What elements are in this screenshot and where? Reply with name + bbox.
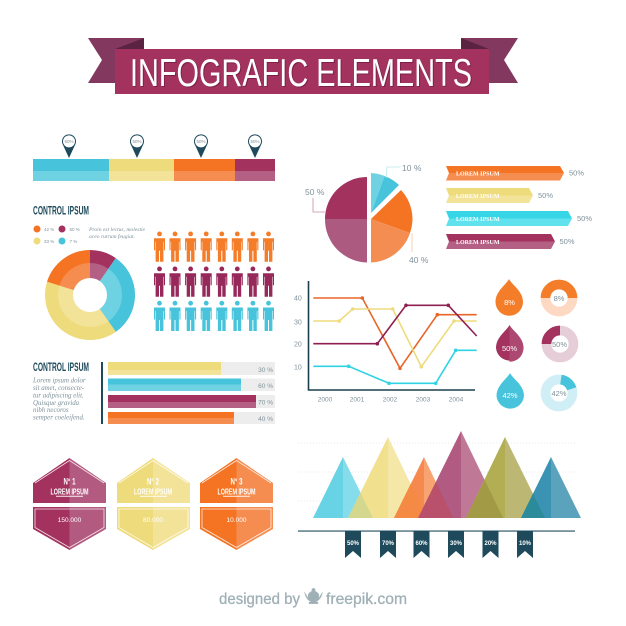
pin 3	[194, 134, 208, 158]
hexagon badge 2	[117, 458, 190, 550]
label 10%: 10 %	[402, 163, 422, 173]
segmented progress bar with pins	[33, 134, 275, 181]
people pictogram: cyan row	[154, 301, 274, 331]
label 50%: 50 %	[305, 187, 325, 197]
hexagon badge 3: N° 3	[230, 476, 242, 488]
drop 42%	[496, 373, 524, 409]
line chart	[294, 281, 477, 404]
ribbon bar cyan: 50%	[577, 214, 592, 223]
ribbon bar maroon	[446, 234, 575, 249]
flag 50%	[345, 532, 361, 558]
ribbon bar cyan	[446, 211, 592, 226]
horizontal bar chart	[101, 362, 275, 424]
body text: Quisque gravida	[33, 400, 80, 407]
footer credit: designed by	[219, 591, 300, 608]
ring 8%: 8%	[554, 294, 565, 303]
pin 3: 50%	[196, 139, 206, 144]
hexagon badge 1	[33, 458, 106, 550]
pie chart	[305, 163, 429, 265]
body text: tur adipiscing elit.	[33, 392, 84, 400]
series: yellow	[313, 307, 477, 369]
ring 42%: 42%	[551, 389, 567, 398]
y axis labels: 30	[294, 320, 302, 326]
flag 20%: 20%	[484, 541, 497, 547]
legend	[34, 226, 80, 244]
body text: Lorem ipsum dolor	[32, 378, 86, 384]
bar: orange 40%: 40 %	[258, 416, 273, 423]
flag 60%: 60%	[415, 541, 428, 547]
footer credit: freepik.com	[326, 591, 407, 608]
hexagon badge 2: N° 2	[147, 476, 159, 488]
footer credit	[219, 588, 407, 608]
legend: 50 %	[70, 227, 80, 232]
people pictogram: orange row	[154, 232, 274, 262]
flag 70%: 70%	[382, 541, 395, 547]
hexagon badge 2: LOREM IPSUM	[134, 486, 172, 496]
hexagon badge 3	[200, 458, 273, 550]
triangle yellow	[348, 437, 427, 518]
series: orange	[313, 296, 477, 370]
hexagon badge 3: 10.000	[227, 517, 247, 524]
bar: yellow 30%	[108, 362, 273, 375]
x axis labels: 2002	[383, 396, 398, 404]
flag 60%	[414, 532, 430, 558]
donut chart	[45, 250, 135, 340]
label 40%: 40 %	[409, 255, 429, 265]
triangle olive	[466, 437, 545, 518]
flag 70%	[380, 532, 396, 558]
bar: orange 40%	[108, 412, 273, 424]
ribbon bar maroon: 50%	[560, 237, 575, 246]
ribbon bar orange: LOREM IPSUM	[456, 172, 500, 178]
y axis labels: 10	[294, 364, 302, 372]
x axis labels: 2001	[350, 396, 365, 404]
legend: 42 %	[44, 227, 54, 232]
ribbon bar orange: 50%	[569, 168, 584, 178]
x axis labels	[318, 396, 464, 404]
icon: freepik logo	[304, 588, 322, 604]
ring 50%	[546, 330, 574, 358]
flag 30%	[448, 532, 464, 558]
body text: nibh necoros	[33, 407, 69, 414]
y axis labels: 20	[294, 342, 302, 348]
hexagon badge 1: N° 1	[64, 476, 76, 488]
ring 8%	[546, 284, 572, 312]
x axis labels: 2003	[416, 396, 431, 404]
series: maroon	[313, 304, 477, 346]
triangle cyan	[313, 457, 373, 518]
x axis labels: 2004	[449, 396, 464, 404]
legend note: Proin est lectus, molestie	[88, 227, 146, 233]
legend note: aceo rutrum feugiat.	[89, 233, 135, 240]
body text: sit amet, consecte-	[33, 385, 85, 392]
drop 42%: 42%	[502, 391, 518, 400]
drop 50%: 50%	[502, 344, 517, 353]
flag 10%: 10%	[519, 541, 532, 547]
body text: semper coeleifend.	[33, 414, 85, 422]
bar: maroon 70%: 70 %	[258, 400, 273, 406]
triangle maroon	[418, 431, 503, 518]
ring 50%: 50%	[552, 340, 567, 349]
pin 1	[62, 134, 76, 158]
triangle area chart	[298, 431, 581, 518]
title banner	[88, 38, 518, 96]
y axis labels: 40	[294, 296, 302, 302]
triangle blue	[521, 457, 581, 518]
bar: cyan 60%	[108, 378, 273, 391]
ribbon bar maroon: LOREM IPSUM	[456, 240, 500, 246]
flag 50%: 50%	[347, 541, 360, 547]
pin 4	[248, 134, 262, 158]
legend: 7 %	[70, 239, 77, 244]
title: INFOGRAFIC ELEMENTS	[130, 52, 472, 95]
drop 8%	[496, 279, 523, 316]
title: INFOGRAFIC ELEMENTS	[131, 53, 473, 96]
hexagon badge 1: 150.000	[58, 517, 82, 524]
series: cyan	[313, 348, 477, 385]
pin 1: 50%	[64, 139, 74, 144]
legend note	[88, 227, 146, 240]
hexagon badge 2: 80.000	[143, 517, 163, 524]
pin 2	[130, 134, 144, 158]
ring 42%	[546, 380, 572, 406]
y axis labels	[294, 296, 302, 372]
x axis labels: 2000	[318, 396, 333, 404]
pin 2: 50%	[132, 139, 142, 144]
ribbon bar yellow: 50%	[538, 191, 553, 200]
triangle orange	[394, 457, 453, 518]
legend: 33 %	[44, 239, 54, 244]
bar: yellow 30%: 30 %	[258, 367, 273, 374]
body text	[32, 378, 86, 422]
flag 10%	[517, 532, 533, 558]
ribbon bar orange	[446, 166, 584, 180]
hexagon badge 3: LOREM IPSUM	[218, 486, 256, 496]
ribbon bar cyan: LOREM IPSUM	[456, 217, 500, 223]
flag 20%	[482, 532, 498, 558]
ribbon bar yellow: LOREM IPSUM	[456, 194, 500, 200]
drop 8%: 8%	[504, 298, 515, 307]
ribbon bar yellow	[446, 188, 553, 203]
ribbon flags	[298, 530, 575, 558]
hexagon badge 1: LOREM IPSUM	[50, 486, 88, 496]
heading: control ipsum 2: CONTROL IPSUM	[33, 362, 89, 374]
bar: maroon 70%	[108, 395, 273, 408]
flag 30%: 30%	[450, 541, 463, 547]
pin 4: 50%	[250, 139, 260, 144]
heading: control ipsum: CONTROL IPSUM	[33, 206, 89, 218]
people pictogram: maroon row	[154, 266, 274, 297]
drop 50%	[496, 325, 524, 362]
bar: cyan 60%: 60 %	[258, 383, 273, 390]
axes	[308, 281, 475, 390]
